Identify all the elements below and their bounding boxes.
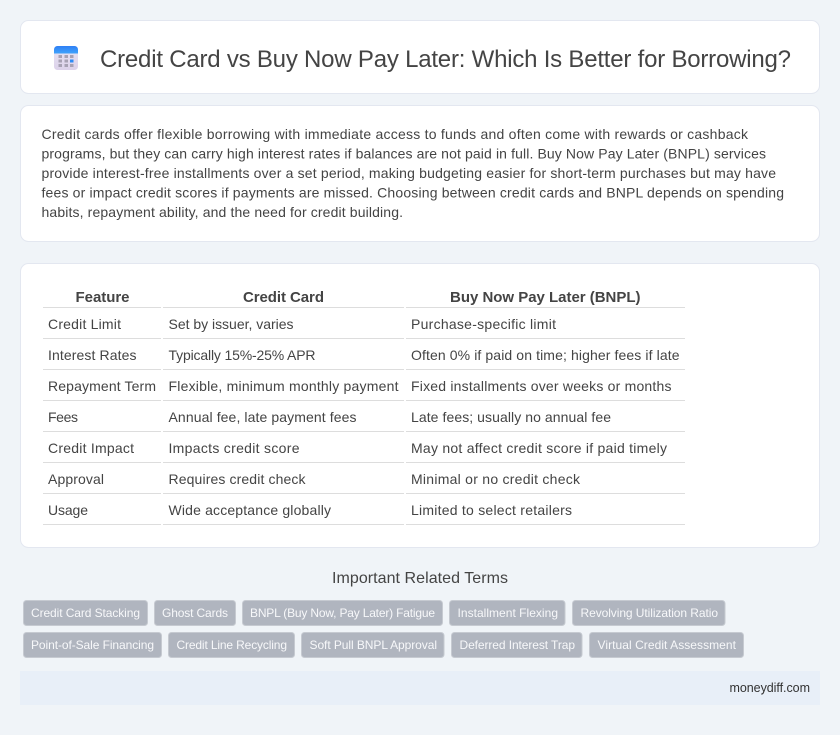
- footer source: moneydiff.com: [730, 681, 810, 695]
- row: credit impact: Credit Impact: [48, 440, 134, 456]
- row: credit limit: Purchase-specific limit: [411, 316, 556, 332]
- panel: title header: [20, 20, 820, 94]
- row: interest rates: Interest Rates: [48, 347, 136, 363]
- row: usage: Wide acceptance globally: [168, 502, 331, 518]
- chip: [572, 600, 725, 626]
- row: repayment term: [48, 378, 672, 394]
- chip: [302, 632, 444, 658]
- table header: Credit Card: [243, 289, 324, 306]
- icon: calendar: [54, 46, 78, 70]
- row: credit impact: [48, 440, 667, 456]
- row: interest rates: Typically 15%-25% APR: [168, 347, 316, 363]
- heading: important related terms: Important Related Terms: [332, 570, 508, 587]
- chip: [154, 600, 236, 626]
- text block: summary paragraph: habits, repayment ability, and the need for credit building.: [42, 204, 403, 220]
- row: repayment term: Flexible, minimum monthly payment: [168, 378, 399, 394]
- panel: comparison table: [20, 264, 820, 548]
- row: usage: [48, 502, 572, 518]
- table header: [76, 289, 640, 306]
- row: repayment term: Repayment Term: [48, 378, 156, 394]
- text block: summary paragraph: fees or impact credit scores if payments are missed. Choosing between credit cards and BNPL depends on spending: [42, 184, 784, 200]
- chip: [24, 600, 148, 626]
- row: credit limit: Credit Limit: [48, 316, 121, 332]
- row: interest rates: Often 0% if paid on time; higher fees if late: [411, 347, 680, 363]
- chip: [450, 600, 565, 626]
- row: credit impact: May not affect credit score if paid timely: [411, 440, 667, 456]
- row: approval: [48, 471, 581, 487]
- chip: Credit Line Recycling: [176, 638, 287, 652]
- chip: [590, 632, 744, 658]
- table header: Buy Now Pay Later (BNPL): [450, 289, 640, 306]
- title: Credit Card vs Buy Now Pay Later: Which Is Better for Borrowing?: [100, 46, 791, 73]
- chip: Soft Pull BNPL Approval: [310, 638, 437, 652]
- row: fees: Fees: [48, 409, 78, 425]
- table header: Feature: [76, 289, 130, 306]
- chip: [24, 632, 162, 658]
- row: repayment term: Fixed installments over weeks or months: [411, 378, 672, 394]
- row: credit limit: [48, 316, 556, 332]
- chip: [452, 632, 582, 658]
- row: usage: Usage: [48, 502, 88, 518]
- row: fees: Annual fee, late payment fees: [168, 409, 356, 425]
- row: interest rates: [48, 347, 680, 363]
- chip: [168, 632, 294, 658]
- footer: [20, 671, 820, 705]
- text block: summary paragraph: Credit cards offer flexible borrowing with immediate access to funds and often come with rewards or cashback: [42, 126, 749, 142]
- row: fees: [48, 409, 611, 425]
- text block: summary paragraph: [42, 126, 784, 220]
- chip: Revolving Utilization Ratio: [580, 606, 718, 620]
- chip: Deferred Interest Trap: [460, 638, 575, 652]
- row: approval: Approval: [48, 471, 104, 487]
- panel: summary: [20, 106, 820, 242]
- chip: Virtual Credit Assessment: [598, 638, 737, 652]
- row: usage: Limited to select retailers: [411, 502, 572, 518]
- row: fees: Late fees; usually no annual fee: [411, 409, 611, 425]
- chip: Ghost Cards: [162, 606, 228, 620]
- text block: summary paragraph: provide interest-free installments over a set period, making budgeting easier for short-term purchases but may have: [42, 165, 776, 181]
- chip: [242, 600, 442, 626]
- text block: summary paragraph: programs, but they can carry high interest rates if balances are not paid in full. Buy Now Pay Later (BNPL) services: [42, 146, 766, 162]
- chip: Credit Card Stacking: [31, 606, 140, 620]
- chip: BNPL (Buy Now, Pay Later) Fatigue: [250, 606, 435, 620]
- related terms chips: [24, 600, 744, 658]
- row: credit limit: Set by issuer, varies: [168, 316, 294, 332]
- chip: Installment Flexing: [458, 606, 558, 620]
- chip: Point-of-Sale Financing: [31, 638, 154, 652]
- row: approval: Requires credit check: [168, 471, 306, 487]
- row: approval: Minimal or no credit check: [411, 471, 581, 487]
- row: credit impact: Impacts credit score: [168, 440, 300, 456]
